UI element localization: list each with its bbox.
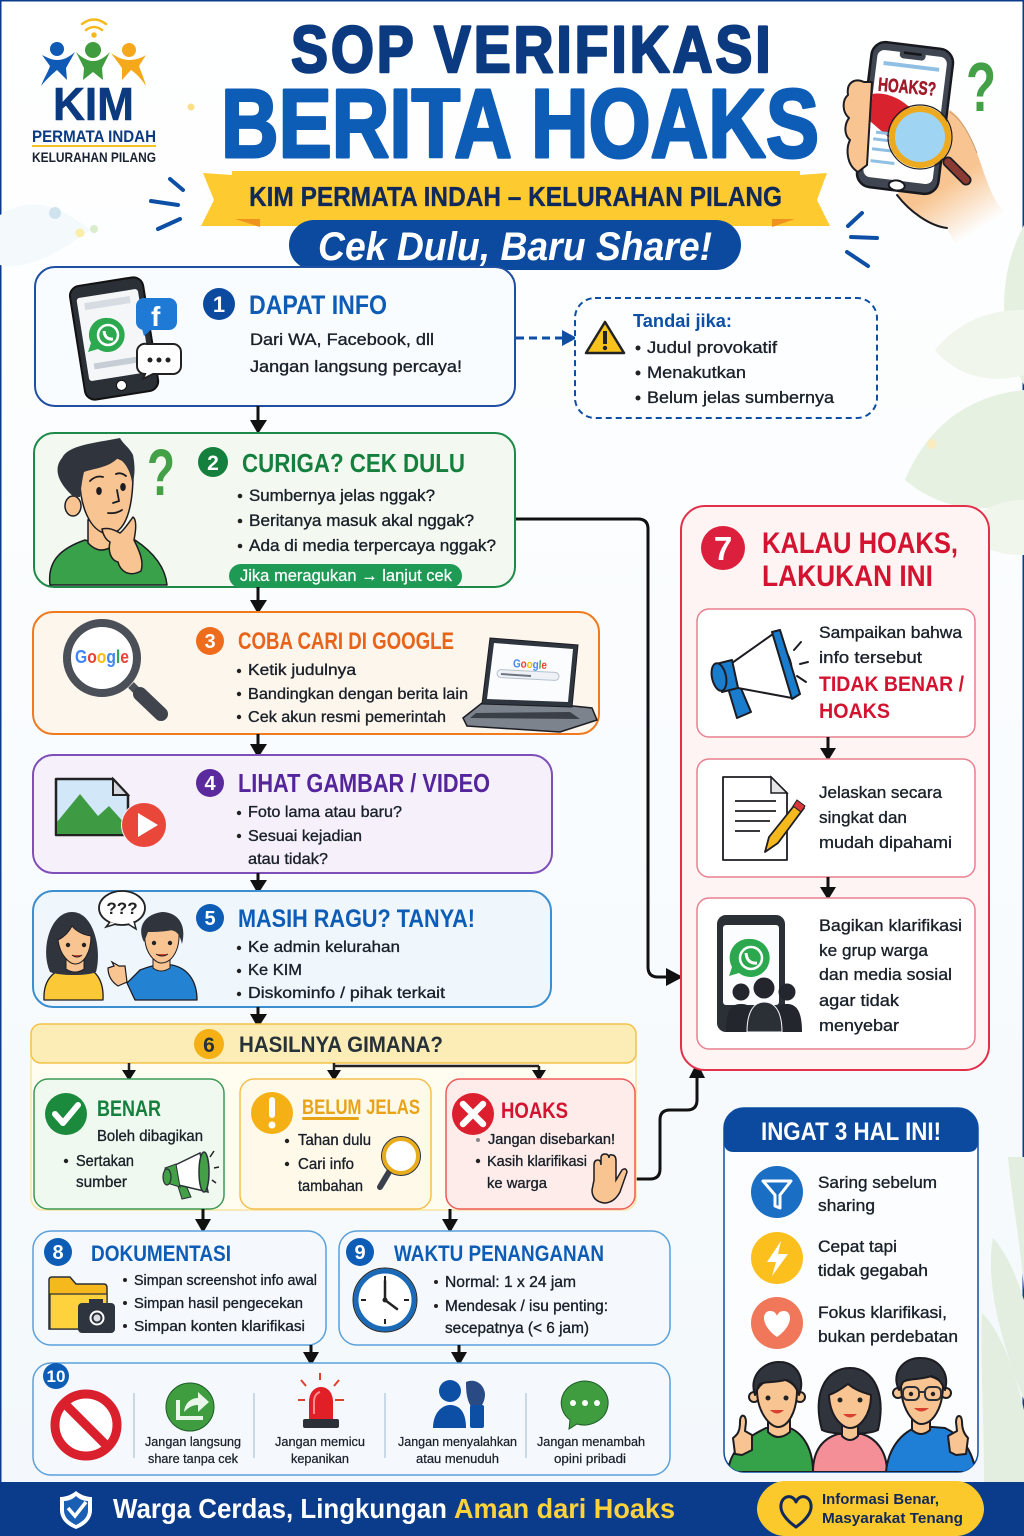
arrow [195,1209,211,1233]
footer band [0,1481,1024,1536]
card text: Jangan disebarkan! [488,1131,615,1148]
illustration: three smiling people [728,1358,976,1472]
heading line 1: KALAU HOAKS, [762,527,958,560]
person middle [813,1368,887,1472]
icon: warning triangle [586,322,624,353]
arrow [442,1209,458,1233]
sub-panel: sampaikan [697,609,975,737]
facebook f: f [151,301,161,332]
heading: DAPAT INFO [249,290,387,320]
bullet continuation: atau tidak? [248,851,328,868]
emphasis: TIDAK BENAR / [819,673,964,696]
icon: question mark: ? [147,435,175,509]
person right [886,1358,976,1472]
heading: WAKTU PENANGANAN [394,1241,604,1266]
number badge 5: 5 [204,908,216,930]
label: atau menuduh [416,1451,499,1466]
card text: Cari info [298,1156,354,1173]
bullet: Cek akun resmi pemerintah [248,709,446,726]
illustration: hand holding phone with magnifier [844,41,1004,248]
number badge 10 [43,1363,69,1389]
number badge 8: 8 [52,1242,64,1264]
text: agar tidak [819,991,900,1010]
icon: shield [60,1491,92,1529]
laptop google word: Google [513,658,547,672]
bullet: Belum jelas sumbernya [647,388,835,407]
bullet: Normal: 1 x 24 jam [445,1274,576,1291]
text: singkat dan [819,808,907,827]
card text: Sertakan [76,1153,134,1170]
number badge 2: 2 [207,452,219,475]
heading: LIHAT GAMBAR / VIDEO [238,768,490,798]
text: menyebar [819,1016,899,1035]
icon: funnel [751,1166,803,1218]
person left [728,1362,813,1472]
number badge 4 [196,769,224,797]
number badge 3 [196,627,224,655]
phone label HOAKS?: HOAKS? [877,75,937,101]
icon: stop hand [592,1154,627,1203]
title line 2: BERITA HOAKS [221,69,819,178]
card: belum jelas [240,1079,431,1209]
panel: step 7 kalau hoaks [681,506,989,1070]
footer slogan: Warga Cerdas, Lingkungan [113,1493,447,1524]
sub-panel: bagikan [697,898,975,1049]
text: Fokus klarifikasi, [818,1303,947,1322]
icon: phone with WhatsApp and group [717,915,802,1032]
card text: tambahan [298,1178,363,1195]
emphasis: HOAKS [819,700,890,723]
bullet: Beritanya masuk akal nggak? [249,511,474,530]
connector arrow: step 2 to step 7 [515,519,683,986]
icon: prohibited sign [55,1394,117,1456]
speech bubble: ??? [106,899,138,918]
heading: Tandai jika: [633,311,732,331]
logo: KIM Permata Indah [32,20,156,165]
bullet: Simpan konten klarifikasi [134,1318,305,1335]
card heading: BELUM JELAS [302,1096,420,1119]
bullet: Sesuai kejadian [248,828,362,845]
panel: step 4 gambar video [33,755,552,873]
title line 1: SOP VERIFIKASI [291,12,771,86]
text: bukan perdebatan [818,1327,958,1346]
badge text: Informasi Benar, [822,1491,939,1508]
panel: step 3 google [33,612,599,734]
icon: magnifier [380,1136,420,1187]
text: Sampaikan bahwa [819,623,963,642]
badge: informasi benar [757,1481,984,1536]
slogan pill [289,220,741,270]
card text: ke warga [487,1175,548,1192]
icon: lightning [751,1232,803,1284]
text: dan media sosial [819,965,952,984]
panel header [724,1108,978,1152]
icon: laptop with Google search [463,638,597,732]
header band: 6 [203,1034,215,1057]
text: Bagikan klarifikasi [819,916,962,935]
icon: red X [452,1093,494,1135]
card heading: BENAR [97,1096,161,1121]
text: sharing [818,1196,875,1215]
connector arrow: hoaks to step 7 [636,1062,705,1179]
callout pill: Jika meragukan → lanjut cek [240,567,453,585]
number badge 7: 7 [714,530,732,567]
icon: heart outline [781,1497,811,1527]
card heading: HOAKS [501,1098,568,1123]
icon: siren [298,1373,344,1428]
arrow [820,877,836,900]
text: Cepat tapi [818,1237,897,1256]
icon: share [166,1383,214,1431]
bullet continuation: secepatnya (< 6 jam) [445,1320,589,1337]
heading line 2: LAKUKAN INI [762,560,933,593]
number badge 9: 9 [354,1242,366,1264]
text line: Dari WA, Facebook, dll [250,330,434,349]
panel: step 1 dapat info [35,267,515,406]
ribbon text: KIM PERMATA INDAH – KELURAHAN PILANG [249,181,782,212]
number badge 10: 10 [47,1367,65,1386]
branch arrows [122,1063,546,1081]
card text: sumber [76,1174,128,1191]
number badge 4: 4 [204,773,216,795]
bullet: Bandingkan dengan berita lain [248,686,468,703]
logo text: Kelurahan Pilang: KELURAHAN PILANG [32,149,156,165]
icon: document with pencil [723,777,805,860]
card text: Boleh dibagikan [97,1128,203,1145]
label: share tanpa cek [148,1451,238,1466]
panel: tandai jika warning [575,298,877,418]
heading: MASIH RAGU? TANYA! [238,905,475,933]
panel: step 10 larangan [33,1363,670,1475]
icon: green megaphone [163,1151,219,1199]
subtitle ribbon [201,171,830,227]
illustration: two people talking [44,891,197,1000]
card text: Tahan dulu [298,1132,371,1149]
heading: DOKUMENTASI [91,1241,231,1266]
icon: heart [751,1297,803,1349]
header band: HASILNYA GIMANA? [239,1032,443,1057]
icon: chat bubble [561,1381,608,1429]
icon: magnifier with Google [67,623,161,714]
panel: step 2 curiga [34,433,515,588]
number badge 1: 1 [213,292,225,317]
logo text: Permata Indah: PERMATA INDAH [32,127,156,146]
number badge 8 [44,1238,72,1266]
bullet: Simpan screenshot info awal [134,1272,317,1289]
bullet: Ketik judulnya [248,662,356,679]
bullet: Judul provokatif [647,338,777,357]
arrow [250,734,267,758]
icon: exclamation [251,1092,293,1134]
bullet: Ke admin kelurahan [248,939,400,956]
sub-panel: jelaskan [697,759,975,877]
text line: Jangan langsung percaya! [250,357,462,376]
callout pill [229,564,462,588]
arrow [451,1345,467,1366]
number badge 5 [196,904,224,932]
text: Saring sebelum [818,1173,937,1192]
dashed arrow: step 1 to warning box [516,330,577,346]
number badge 2 [198,447,228,477]
bullet: Diskominfo / pihak terkait [248,985,446,1002]
bullet: Ke KIM [248,962,302,979]
footer slogan: Aman dari Hoaks [454,1493,675,1524]
panel: ingat 3 hal [724,1108,978,1472]
number badge 1 [203,288,235,320]
text: tidak gegabah [818,1261,928,1280]
bullet: Foto lama atau baru? [248,804,402,821]
panel header: INGAT 3 HAL INI! [761,1118,941,1146]
number badge 3: 3 [204,631,216,653]
bullet: Sumbernya jelas nggak? [249,486,435,505]
arrow [250,587,267,614]
heading: COBA CARI DI GOOGLE [238,628,454,655]
slogan text: Cek Dulu, Baru Share! [318,225,712,269]
icon: image and video play [56,779,167,848]
label: Jangan menyalahkan [398,1434,517,1449]
speech bubble [99,891,145,929]
bullet: Mendesak / isu penting: [445,1298,608,1315]
icon: green question mark: ? [966,48,996,126]
panel: step 8 dokumentasi [33,1231,326,1345]
card text: Kasih klarifikasi [487,1153,587,1170]
arrow [303,1345,319,1366]
arrow [250,873,267,894]
illustration: thinking person [50,438,167,585]
card: benar [34,1079,224,1209]
title [221,12,819,178]
icon: phone with WhatsApp and Facebook [69,276,181,401]
arrow [250,1007,267,1028]
icon: blue megaphone [709,630,808,718]
bullet: Menakutkan [647,363,746,382]
icon: folder with camera [49,1277,115,1333]
number badge 7 [701,526,745,570]
arrow [820,737,836,761]
icon: three people figures [41,42,146,86]
label: opini pribadi [554,1451,626,1466]
label: Jangan memicu [275,1434,365,1449]
badge text: Masyarakat Tenang [822,1510,963,1527]
google word: Google [75,647,129,667]
icon: wifi signal [82,20,106,36]
header band [31,1024,636,1063]
panel: step 6 hasilnya gimana [31,1024,636,1210]
arrow [250,406,267,434]
text: mudah dipahami [819,833,952,852]
panel: step 9 waktu penanganan [339,1231,670,1345]
icon: clock [353,1268,417,1332]
text: info tersebut [819,648,922,667]
bullet: Simpan hasil pengecekan [134,1295,303,1312]
label: Jangan langsung [145,1434,241,1449]
text: ke grup warga [819,941,929,960]
heading: CURIGA? CEK DULU [242,448,465,478]
label: Jangan menambah [537,1434,645,1449]
icon: check [45,1093,87,1135]
panel: step 5 tanya [33,891,551,1007]
bullet: Ada di media terpercaya nggak? [249,536,496,555]
text: Jelaskan secara [819,783,943,802]
card: hoaks [446,1079,635,1209]
number badge 9 [346,1238,374,1266]
label: kepanikan [291,1451,349,1466]
logo wordmark KIM: KIM [53,78,134,130]
icon: person with phone [433,1380,485,1428]
